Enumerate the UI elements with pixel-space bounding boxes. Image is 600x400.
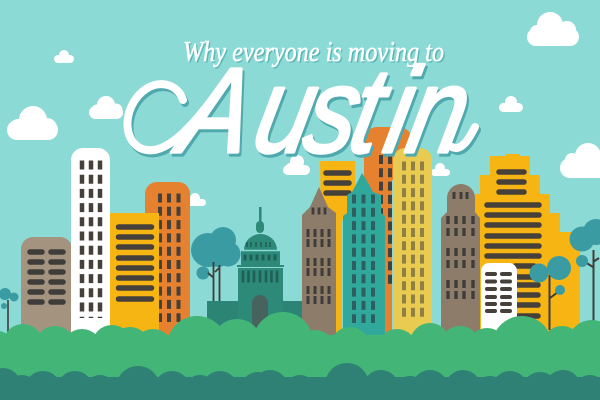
cloud: right edge <box>560 143 600 178</box>
tree beside capitol <box>191 227 240 322</box>
building: yellow stepped <box>475 154 580 340</box>
cloud: top right <box>527 12 579 46</box>
cloud: top left small <box>54 50 74 63</box>
building: tan left <box>21 237 72 340</box>
building: teal art deco <box>343 173 385 340</box>
cloud: near orange tower <box>185 193 206 206</box>
capitol dome <box>244 234 277 250</box>
capitol windows <box>245 254 275 260</box>
cloud: left large <box>7 106 58 140</box>
subtitle: Why everyone is moving to <box>184 38 446 70</box>
building: light yellow tower <box>393 148 432 340</box>
subtitle: Why everyone is moving to <box>183 37 444 68</box>
building: white tower <box>71 148 110 340</box>
title swash shadow <box>129 75 477 153</box>
title text: Austin <box>165 43 483 178</box>
front bushes <box>0 312 600 385</box>
capitol building <box>207 207 303 340</box>
clouds <box>7 12 600 206</box>
cloud: centre <box>283 155 310 175</box>
building: yellow slatted <box>110 213 159 340</box>
tree right <box>530 256 571 330</box>
title swash <box>127 72 475 150</box>
capitol body <box>238 268 283 340</box>
small tree far left <box>0 288 18 340</box>
building: back yellow <box>320 161 355 340</box>
rear bushes <box>0 363 600 400</box>
cloud: behind towers <box>431 163 450 176</box>
title <box>127 37 485 181</box>
building: tan gabled <box>302 187 336 340</box>
main title <box>127 43 485 181</box>
tree far right <box>570 219 600 325</box>
building: orange back tower <box>364 127 412 340</box>
capitol door <box>252 295 268 340</box>
building: tan domed <box>441 184 480 340</box>
title shadow: Austin <box>167 46 485 181</box>
cloud: left medium <box>89 96 123 119</box>
building: orange tower <box>145 182 190 340</box>
capitol wings <box>207 301 303 340</box>
building: white small <box>481 263 517 340</box>
cloud: right small <box>499 96 523 112</box>
